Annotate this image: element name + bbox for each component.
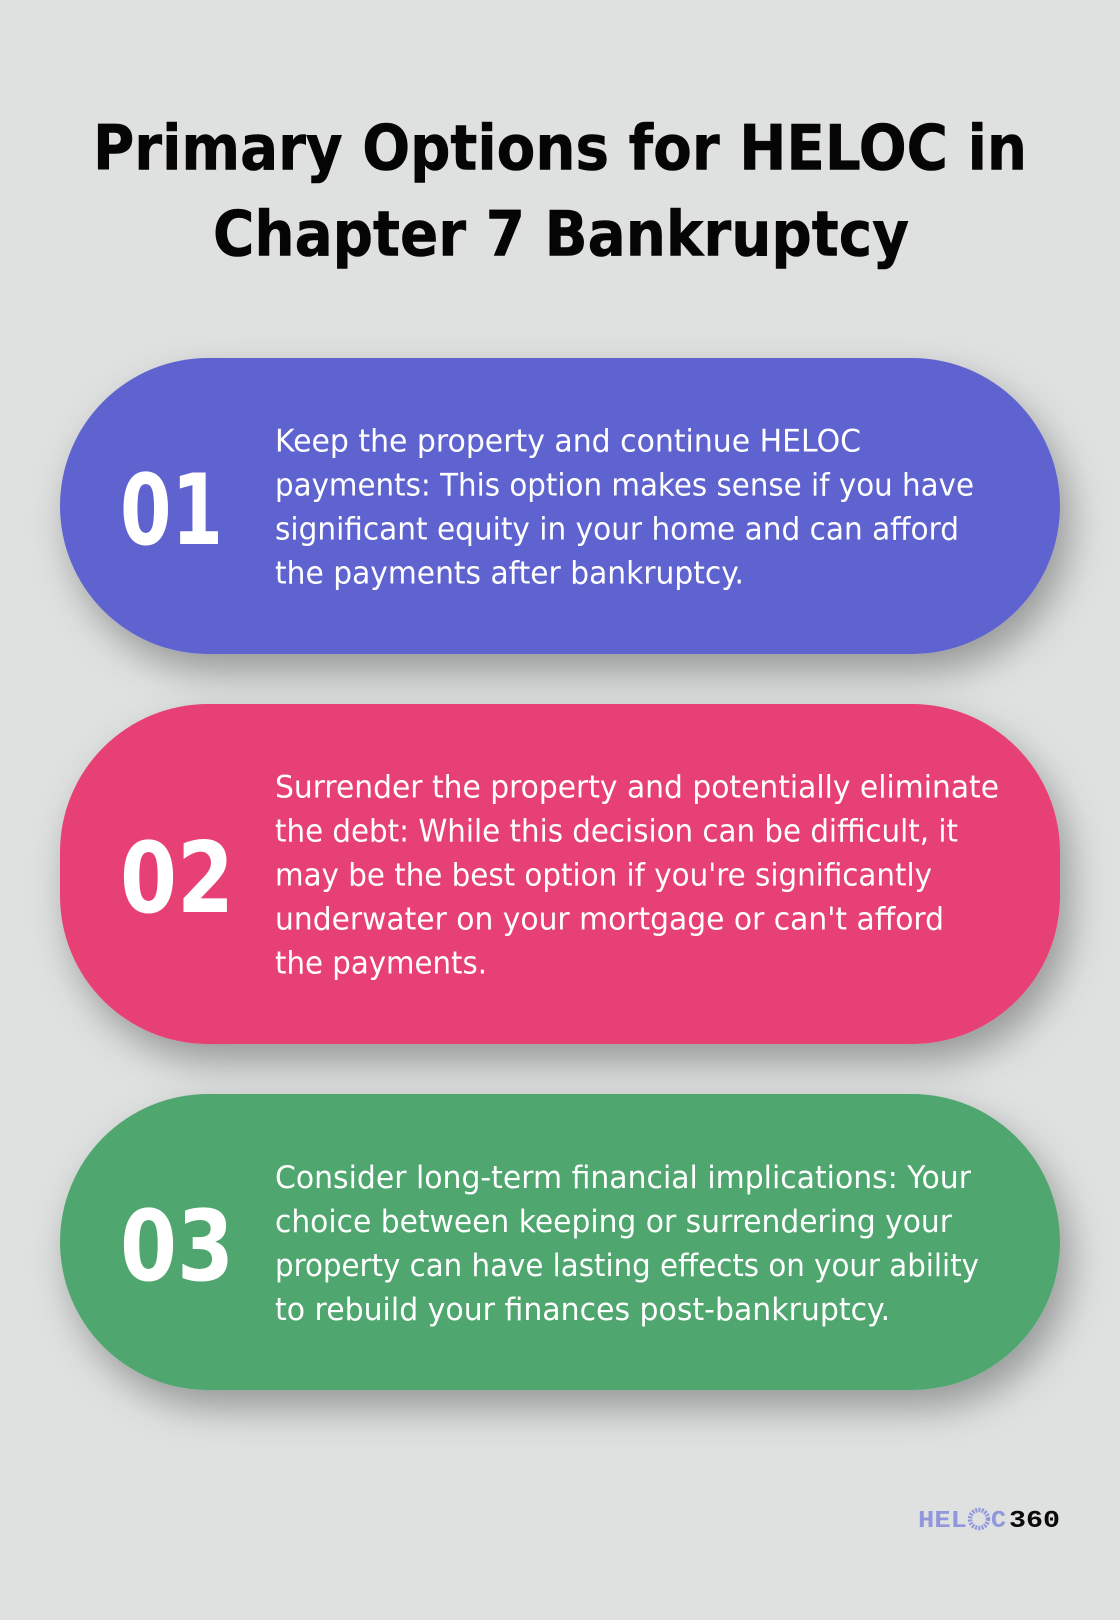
- text block: option 02 description: Surrender the property and potentially eliminate: [275, 770, 999, 806]
- logo: HELOC360: 360: [1009, 1508, 1060, 1535]
- text block: option 03 description: choice between keeping or surrendering your: [275, 1204, 952, 1240]
- text block: option 02 description: the debt: While this decision can be difficult, it: [275, 814, 958, 850]
- logo: HELOC360: C: [991, 1508, 1006, 1535]
- text block: option 03 description: property can have lasting effects on your ability: [275, 1248, 979, 1284]
- panel: option 02: [60, 704, 1060, 1044]
- text block: option 02 description: [275, 770, 999, 982]
- text block: option 01 description: Keep the property and continue HELOC: [275, 424, 861, 460]
- text block: option 01 description: significant equity in your home and can afford: [275, 512, 959, 548]
- number 03: 03: [120, 1190, 234, 1304]
- panel background: green pill: [60, 1094, 1060, 1390]
- text block: option 02 description: the payments.: [275, 946, 487, 982]
- text block: option 01 description: payments: This option makes sense if you have: [275, 468, 974, 504]
- text block: option 02 description: underwater on your mortgage or can't afford: [275, 902, 944, 938]
- icon: logo ring: [970, 1510, 988, 1528]
- panel background: blue pill: [60, 358, 1060, 654]
- text block: option 03 description: Consider long-term financial implications: Your: [275, 1160, 971, 1196]
- title: [93, 112, 1027, 270]
- logo: HELOC360: [918, 1508, 1060, 1535]
- number 01: 01: [120, 454, 223, 568]
- text block: option 01 description: the payments after bankruptcy.: [275, 556, 744, 592]
- panel: option 03: [60, 1094, 1060, 1390]
- number 02: 02: [120, 822, 234, 936]
- text block: option 02 description: may be the best option if you're significantly: [275, 858, 932, 894]
- logo: HELOC360: HEL: [918, 1508, 967, 1535]
- text block: option 01 description: [275, 424, 974, 592]
- title: Chapter 7 Bankruptcy: [213, 198, 909, 270]
- title: Primary Options for HELOC in: [93, 112, 1027, 184]
- panel background: pink pill: [60, 704, 1060, 1044]
- text block: option 03 description: to rebuild your finances post-bankruptcy.: [275, 1292, 890, 1328]
- panel: option 01: [60, 358, 1060, 654]
- text block: option 03 description: [275, 1160, 979, 1328]
